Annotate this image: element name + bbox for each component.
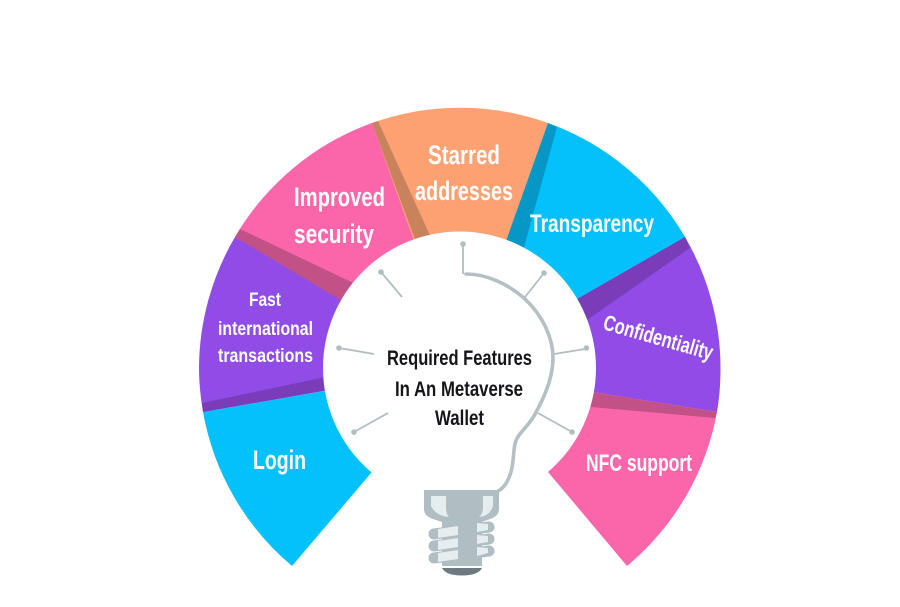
bulb outline: [466, 274, 553, 491]
label: fast international transactions: transactions: [218, 346, 313, 367]
center title: Wallet: [435, 407, 484, 430]
segment: login: [203, 391, 372, 566]
label: fast international transactions: Fast: [249, 290, 282, 311]
label: starred addresses: Starred: [428, 140, 500, 170]
label: improved security: Improved: [294, 182, 385, 212]
label: improved security: [294, 182, 385, 249]
center title: [387, 347, 532, 430]
label: transparency: Transparency: [530, 210, 654, 238]
label: starred addresses: [415, 140, 513, 206]
center title: In An Metaverse: [395, 378, 523, 401]
label: login: Login: [253, 445, 306, 475]
label: starred addresses: addresses: [415, 176, 513, 206]
segment: nfc support: [548, 390, 717, 566]
label: fast international transactions: international: [218, 319, 313, 340]
label: improved security: security: [294, 219, 374, 249]
bulb glass: [323, 232, 596, 504]
segment: fast international transactions: [199, 237, 380, 412]
bulb base: [424, 490, 499, 576]
segment: starred addresses: [372, 108, 548, 258]
segment: confidentiality: [565, 237, 720, 412]
segment: transparency: [500, 123, 685, 306]
center title: Required Features: [387, 347, 532, 370]
rays: [336, 241, 589, 435]
segment: improved security: [235, 123, 425, 310]
label: confidentiality: Confidentiality: [601, 310, 717, 365]
label: nfc support: NFC support: [586, 450, 692, 477]
label: fast international transactions: [218, 290, 313, 367]
